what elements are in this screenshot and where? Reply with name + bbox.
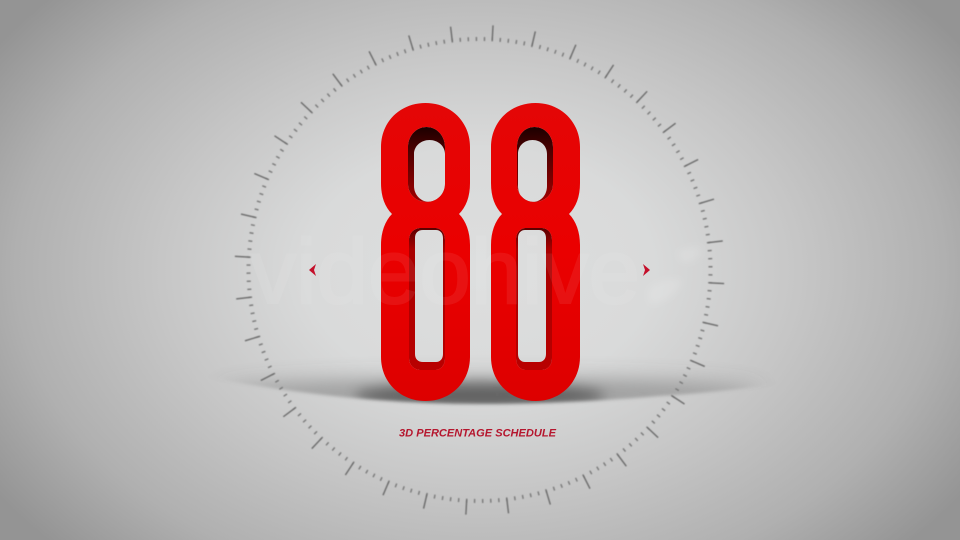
digit: left 8 — [381, 103, 470, 401]
circular tick ring — [230, 20, 729, 520]
watermark leaf — [648, 247, 702, 304]
digit: right 8 — [491, 103, 580, 401]
caption: 3D PERCENTAGE SCHEDULE — [399, 428, 557, 440]
right arrow marker — [643, 264, 650, 276]
watermark text: videohive — [250, 221, 640, 323]
floor shadow — [220, 379, 760, 409]
big number 88 — [381, 103, 580, 401]
left arrow marker — [309, 264, 316, 276]
